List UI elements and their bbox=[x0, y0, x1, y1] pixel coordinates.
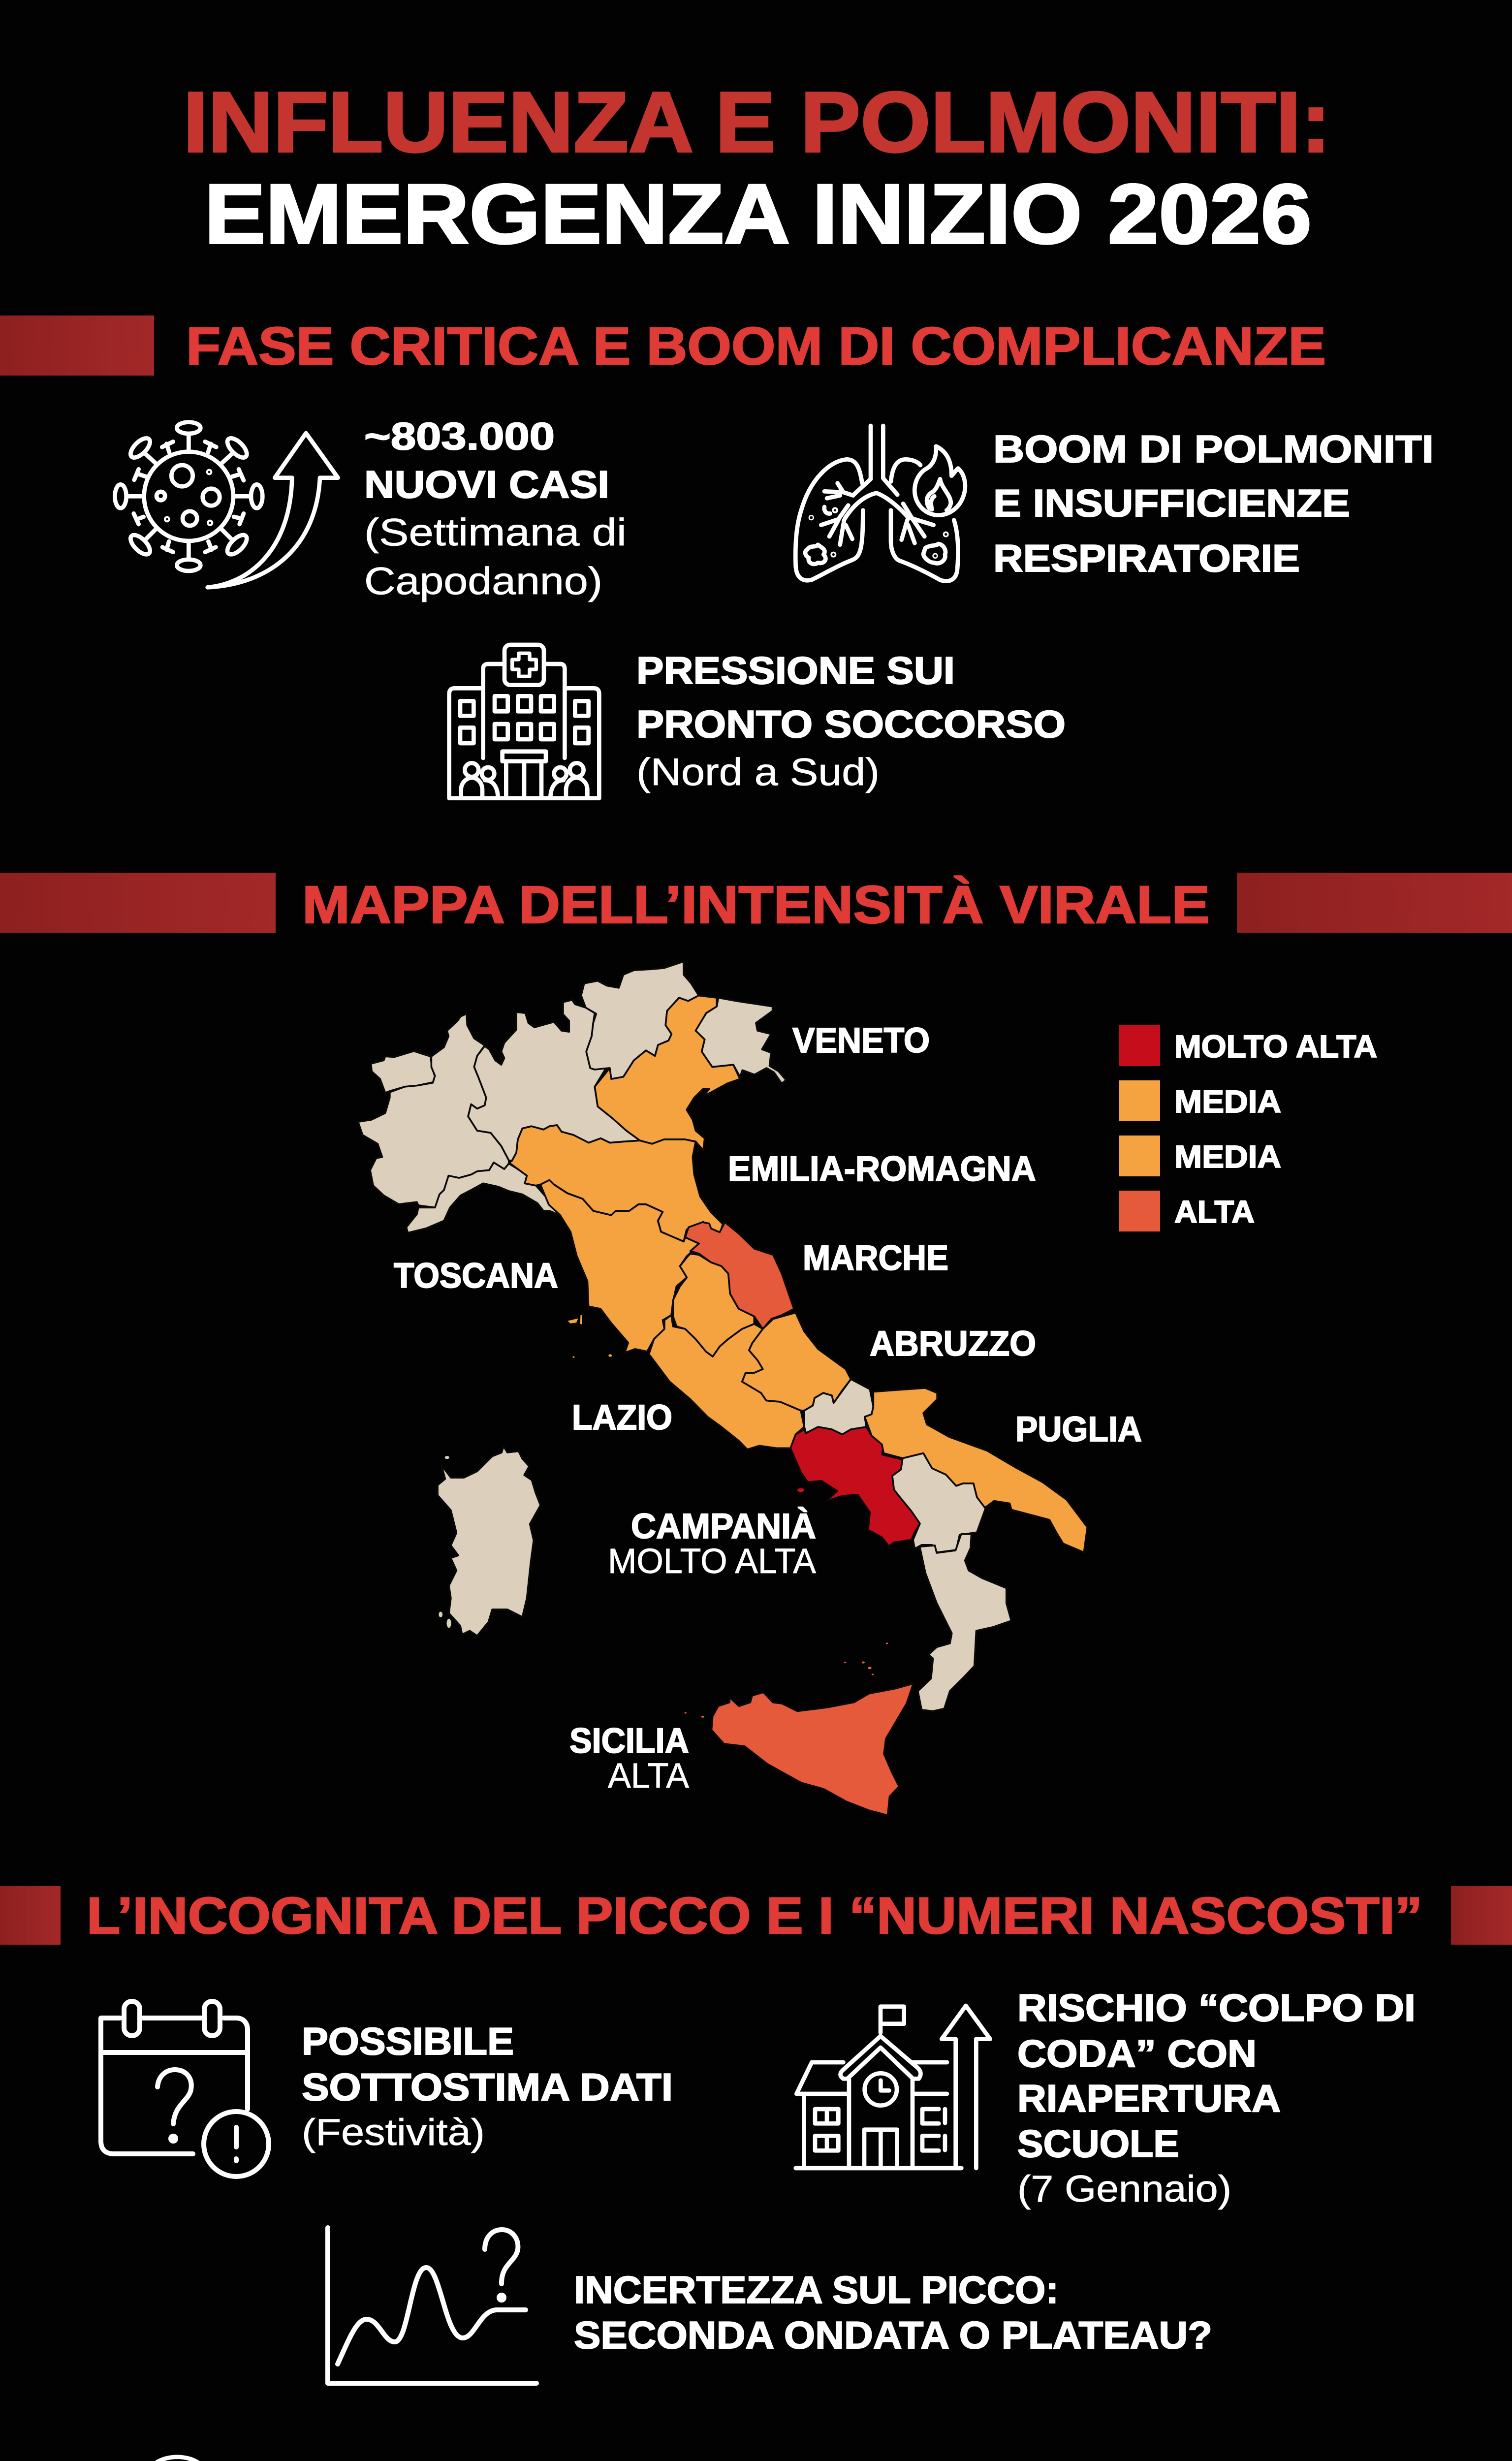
text: incertezza: SECONDA ONDATA O PLATEAU? bbox=[574, 2313, 1212, 2357]
icon: uncertain peak chart bbox=[328, 2228, 536, 2383]
text: pressione pronto soccorso bbox=[636, 649, 1066, 793]
region: Puglia bbox=[865, 1388, 1087, 1552]
text: pressione pronto soccorso: PRESSIONE SUI bbox=[636, 649, 955, 692]
map labels: EMILIA-ROMAGNA bbox=[728, 1150, 1036, 1189]
text: boom di polmoniti bbox=[993, 427, 1434, 580]
title bbox=[183, 74, 1331, 261]
icon: hospital bbox=[449, 645, 599, 798]
text: boom di polmoniti: BOOM DI POLMONITI bbox=[993, 427, 1434, 471]
small islands bbox=[439, 1456, 888, 1718]
region: Valle d'Aosta bbox=[371, 1051, 435, 1093]
map labels: ABRUZZO bbox=[870, 1325, 1036, 1363]
text: sottostima: (Festività) bbox=[302, 2112, 485, 2153]
text: pressione pronto soccorso: (Nord a Sud) bbox=[636, 750, 880, 793]
legend: MOLTO ALTA bbox=[1174, 1029, 1377, 1064]
text: nuovi casi bbox=[364, 414, 627, 602]
section heading: incognita: L’INCOGNITA DEL PICCO E I “NUMERI NASCOSTI” bbox=[87, 1887, 1422, 1945]
map labels: SICILIA bbox=[569, 1722, 689, 1761]
icon: doctor bbox=[106, 2457, 249, 2461]
text: colpo di coda bbox=[1017, 1986, 1416, 2210]
text: nuovi casi: (Settimana di bbox=[364, 510, 627, 554]
section heading: mappa bbox=[0, 873, 1512, 934]
map labels: VENETO bbox=[792, 1021, 930, 1060]
map labels: CAMPANIÀ bbox=[631, 1507, 816, 1546]
southern regions and islands bbox=[438, 1446, 1011, 1815]
legend: MEDIA bbox=[1174, 1084, 1281, 1119]
text: nuovi casi: NUOVI CASI bbox=[364, 463, 609, 506]
region: Calabria bbox=[918, 1534, 1011, 1711]
map labels: MOLTO ALTA bbox=[608, 1542, 817, 1581]
region: Campania bbox=[790, 1427, 920, 1546]
region: Abruzzo bbox=[742, 1313, 851, 1411]
text: boom di polmoniti: RESPIRATORIE bbox=[993, 536, 1300, 580]
icon: calendar with warning bbox=[101, 2001, 269, 2177]
region: Piemonte bbox=[358, 1014, 509, 1207]
icon: virus with rising arrow bbox=[115, 422, 338, 587]
text: colpo di coda: RISCHIO “COLPO DI bbox=[1017, 1986, 1416, 2029]
region: Basilicata bbox=[892, 1453, 985, 1552]
map labels: ALTA bbox=[608, 1757, 690, 1796]
legend: MEDIA bbox=[1174, 1139, 1281, 1174]
northern regions bbox=[358, 961, 786, 1242]
text: incertezza bbox=[574, 2268, 1212, 2357]
region: Umbria bbox=[673, 1254, 754, 1357]
text: colpo di coda: (7 Gennaio) bbox=[1017, 2168, 1231, 2210]
icon: school with rising arrow bbox=[796, 2006, 990, 2168]
map labels: MARCHE bbox=[803, 1239, 948, 1278]
text: sottostima bbox=[302, 2019, 673, 2153]
text: boom di polmoniti: E INSUFFICIENZE bbox=[993, 481, 1350, 525]
text: sottostima: POSSIBILE bbox=[302, 2019, 514, 2063]
map labels: PUGLIA bbox=[1015, 1410, 1142, 1449]
map labels: LAZIO bbox=[572, 1398, 672, 1437]
region: Toscana bbox=[540, 1180, 699, 1353]
section heading: fase critica: FASE CRITICA E BOOM DI COMPLICANZE bbox=[186, 316, 1326, 376]
map labels bbox=[394, 1021, 1142, 1796]
central regions bbox=[540, 1180, 1087, 1552]
text: pressione pronto soccorso: PRONTO SOCCORSO bbox=[636, 702, 1066, 746]
region: Sicilia bbox=[712, 1683, 914, 1815]
text: incertezza: INCERTEZZA SUL PICCO: bbox=[574, 2268, 1059, 2311]
legend bbox=[1119, 1025, 1377, 1231]
title: EMERGENZA INIZIO 2026 bbox=[204, 167, 1312, 261]
legend: ALTA bbox=[1174, 1194, 1255, 1230]
region: Veneto bbox=[595, 996, 740, 1150]
region: Emilia-Romagna bbox=[509, 1125, 723, 1242]
region: Marche bbox=[685, 1222, 794, 1329]
small islands: Elba, Ischia bbox=[568, 1315, 804, 1492]
region: Lombardia bbox=[468, 1000, 640, 1161]
region: Liguria bbox=[407, 1163, 560, 1233]
text: colpo di coda: SCUOLE bbox=[1017, 2122, 1179, 2165]
map labels: TOSCANA bbox=[394, 1257, 558, 1295]
title: INFLUENZA E POLMONITI: bbox=[183, 74, 1331, 170]
region: Friuli bbox=[695, 998, 786, 1083]
region: Lazio bbox=[649, 1315, 804, 1450]
text: nuovi casi: ~803.000 bbox=[364, 414, 555, 458]
region: Sardegna bbox=[438, 1446, 540, 1636]
text: nuovi casi: Capodanno) bbox=[364, 559, 602, 602]
text: colpo di coda: RIAPERTURA bbox=[1017, 2077, 1281, 2120]
text: colpo di coda: CODA” CON bbox=[1017, 2032, 1257, 2075]
region: Molise bbox=[804, 1379, 873, 1434]
map of Italy bbox=[358, 961, 1087, 1815]
section heading: mappa: MAPPA DELL’INTENSITÀ VIRALE bbox=[302, 875, 1210, 934]
region: Trentino-Alto Adige bbox=[581, 961, 699, 1079]
icon: lungs with flame bbox=[795, 426, 965, 581]
text: sottostima: SOTTOSTIMA DATI bbox=[302, 2065, 673, 2109]
